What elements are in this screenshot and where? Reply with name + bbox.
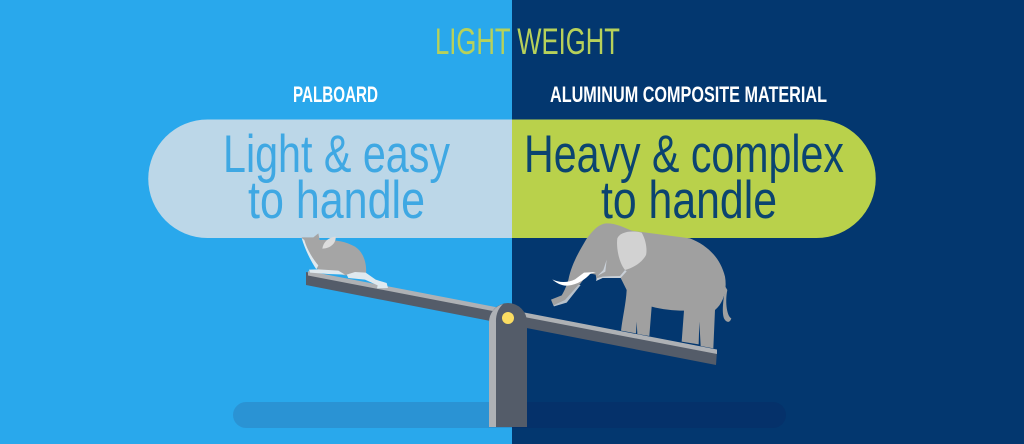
- text: heavy and complex to handle: to handle: [601, 171, 777, 230]
- right background panel: [512, 0, 1024, 444]
- mouse hind foot and tail: [347, 272, 388, 288]
- seesaw pivot: [489, 303, 527, 427]
- text: heavy and complex to handle: Heavy & complex: [524, 125, 844, 184]
- elephant ear: [617, 231, 646, 270]
- elephant body: [551, 223, 726, 348]
- pivot pin: [502, 312, 514, 324]
- elephant jaw highlight: [596, 260, 627, 281]
- mouse ear: [322, 237, 336, 249]
- pill: aluminum composite material: [512, 120, 876, 238]
- mouse body: [302, 233, 366, 275]
- left background panel: [0, 0, 512, 444]
- text: light and easy to handle: [223, 125, 450, 230]
- text: light and easy to handle: to handle: [248, 171, 425, 230]
- text: light and easy to handle: Light & easy: [223, 125, 450, 184]
- icon: elephant: [551, 223, 731, 348]
- elephant tusk: [552, 272, 596, 286]
- title: LIGHT WEIGHT: [435, 21, 620, 62]
- heading: aluminum composite material: ALUMINUM COMPOSITE MATERIAL: [550, 82, 827, 107]
- ground shadow: [233, 402, 786, 428]
- elephant tail: [723, 287, 731, 322]
- elephant trunk edge: [553, 285, 581, 306]
- heading: palboard: PALBOARD: [293, 82, 378, 107]
- pill: palboard: [148, 120, 512, 238]
- text: heavy and complex to handle: [524, 125, 844, 230]
- mouse front foot: [309, 269, 345, 275]
- icon: mouse: [302, 233, 388, 288]
- seesaw beam: [306, 271, 717, 365]
- mouse chest highlight: [302, 238, 318, 269]
